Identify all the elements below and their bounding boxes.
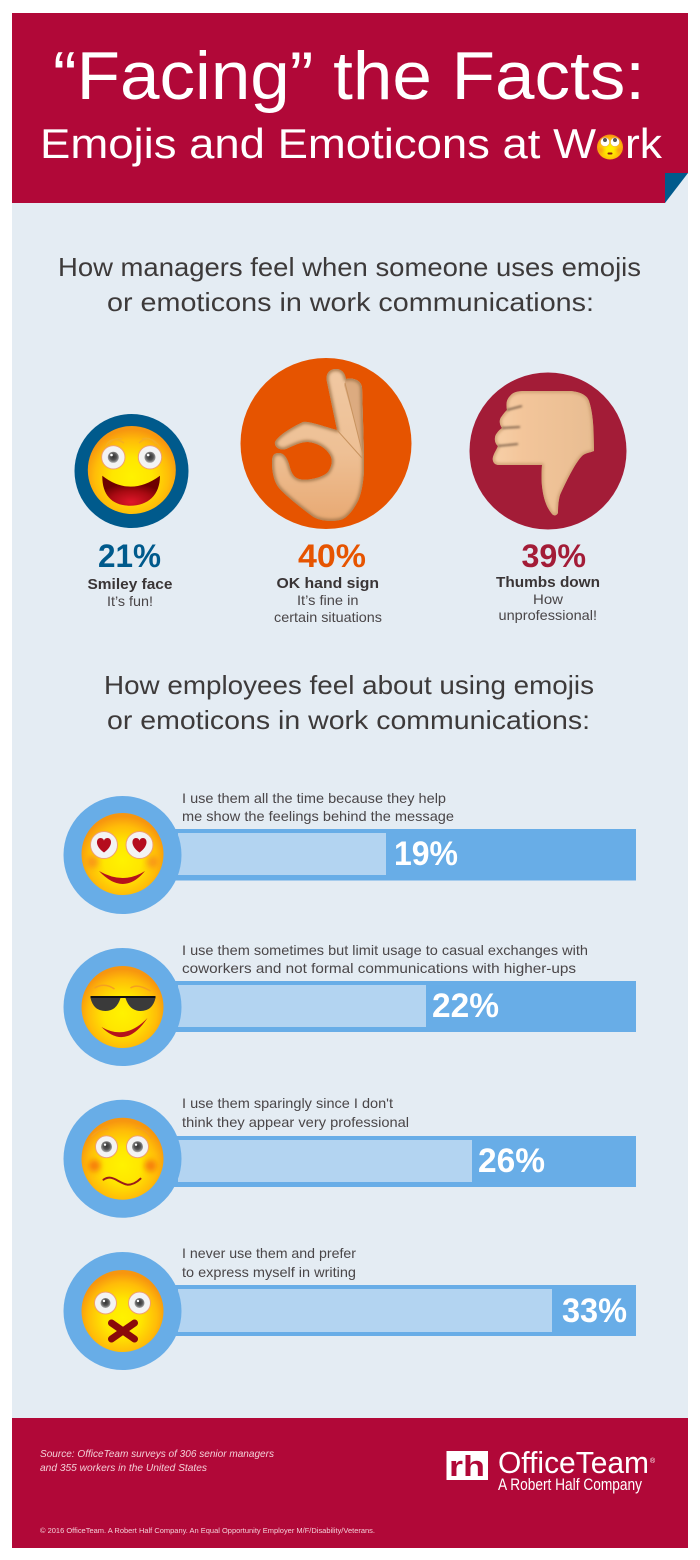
caption (182, 1095, 409, 1130)
title line 2: rk (625, 120, 663, 167)
heading: employees (104, 670, 594, 735)
logo: OfficeTeam: A Robert Half Company (498, 1475, 642, 1494)
row: 26% use them sparingly (64, 1095, 636, 1218)
logo: OfficeTeam: rh (449, 1451, 485, 1483)
text: it's fun: It’s fun! (107, 593, 153, 609)
heading: managers: How managers feel when someone uses emojis (58, 252, 641, 282)
caption: I use them all the time because they help (182, 790, 446, 806)
icon: thumbs down in red circle (470, 372, 626, 530)
caption: I use them sparingly since I don't (182, 1095, 393, 1111)
heading: managers: or emoticons in work communications: (107, 287, 594, 317)
label: smiley face: Smiley face (88, 576, 172, 593)
text: how unprofessional (498, 591, 597, 623)
title line 2: Emojis and Emoticons at W (40, 120, 596, 167)
source note: and 355 workers in the United States (40, 1462, 208, 1474)
logo: OfficeTeam: ® (650, 1457, 656, 1465)
value: 21%: 21% (98, 538, 161, 574)
row: 22% use them sometimes (64, 942, 636, 1066)
caption (182, 1245, 356, 1280)
panel: thumbs down stat (470, 372, 626, 623)
text: fine in certain situations: certain situations (274, 609, 382, 625)
bar: 22% (432, 987, 499, 1025)
icon: sunglasses emoji (64, 948, 182, 1066)
bar (150, 981, 636, 1032)
bar (150, 829, 636, 880)
bar: 26% (478, 1142, 545, 1180)
text: how unprofessional: unprofessional! (498, 607, 597, 623)
copyright: © 2016 OfficeTeam. A Robert Half Company. An Equal Opportunity Employer M/F/Disability/Veterans. (40, 1527, 375, 1535)
page fold (665, 173, 688, 203)
icon: rolling eyes emoji in title (597, 134, 623, 160)
source note: Source: OfficeTeam surveys of 306 senior managers (40, 1448, 275, 1460)
row: 33% never use them (64, 1245, 636, 1370)
footer banner (12, 1418, 688, 1548)
panel: OK hand stat (240, 358, 412, 625)
bar (150, 1136, 636, 1187)
caption (182, 942, 588, 976)
caption (182, 790, 454, 824)
caption: coworkers and not formal communications with higher-ups (182, 960, 576, 976)
caption: me show the feelings behind the message (182, 808, 454, 824)
label: thumbs down: Thumbs down (496, 574, 600, 591)
logo: OfficeTeam (446, 1445, 656, 1494)
row: 19% use them all the time (64, 790, 636, 914)
value: 40%: 40% (298, 538, 366, 574)
heading: employees: or emoticons in work communications: (107, 705, 590, 735)
panel: light background (12, 173, 688, 1418)
icon: mouth crossed emoji (64, 1252, 182, 1370)
heading: employees: How employees feel about using emojis (104, 670, 594, 700)
icon: smiley face in blue circle (74, 414, 188, 528)
icon: OK hand in orange circle (240, 358, 412, 529)
icon: heart eyes emoji (64, 796, 182, 914)
text: fine in certain situations (274, 592, 382, 625)
heading: managers (58, 252, 641, 317)
caption: I never use them and prefer (182, 1245, 356, 1261)
text: how unprofessional: How (533, 591, 564, 607)
icon: worried emoji (64, 1100, 182, 1218)
bar: 19% (394, 835, 458, 873)
value: 39%: 39% (522, 538, 586, 574)
header banner (12, 13, 688, 203)
panel: smiley face stat (74, 414, 188, 609)
bar (150, 1285, 636, 1336)
caption: to express myself in writing (182, 1264, 356, 1280)
label: OK hand sign: OK hand sign (276, 575, 379, 592)
text: fine in certain situations: It’s fine in (297, 592, 358, 608)
source note (40, 1448, 275, 1474)
bar: 33% (562, 1292, 627, 1330)
caption: I use them sometimes but limit usage to casual exchanges with (182, 942, 588, 958)
logo: OfficeTeam: OfficeTeam (498, 1445, 649, 1480)
title line 1: “Facing” the Facts: (53, 38, 645, 114)
caption: think they appear very professional (182, 1114, 409, 1130)
title line 2: o (599, 120, 622, 167)
